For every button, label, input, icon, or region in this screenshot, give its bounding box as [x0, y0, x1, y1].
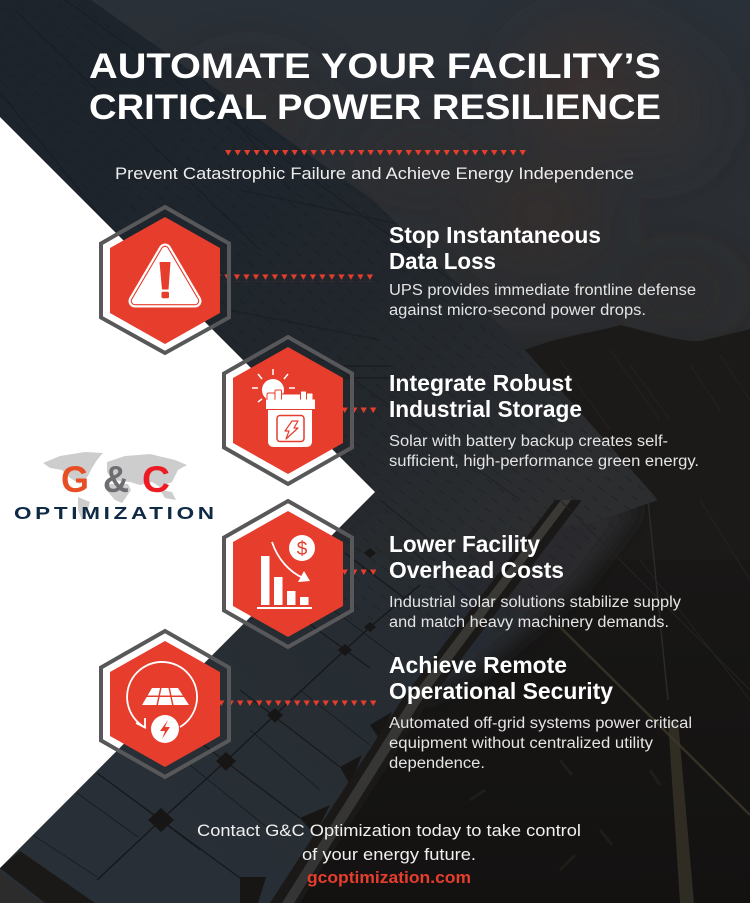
letters: & — [103, 459, 129, 500]
section 2 text: Solar with battery backup creates self- — [389, 433, 668, 450]
call to action — [197, 821, 581, 887]
connector: hexagon 4 to text — [218, 700, 376, 708]
section 2 text: Integrate Robust — [389, 370, 572, 396]
section 1 text — [389, 222, 696, 319]
section 3 text: Overhead Costs — [389, 557, 564, 583]
section 4 text: Automated off-grid systems power critical — [389, 715, 692, 732]
logo: G&C Optimization — [14, 452, 218, 523]
title: AUTOMATE YOUR FACILITY’S — [89, 47, 661, 86]
hexagon 4: solar panel and power icon — [101, 631, 229, 777]
connector: hexagon 1 to text — [215, 274, 373, 281]
section 3 text — [389, 531, 681, 631]
icon: warning triangle — [135, 250, 195, 301]
section 3 text: and match heavy machinery demands. — [389, 614, 669, 631]
section 4 text: Operational Security — [389, 678, 613, 704]
panel joints on the lower panels — [148, 548, 392, 903]
icon: bars, arrow and dollar — [257, 535, 315, 609]
section 4 text: equipment without centralized utility — [389, 735, 653, 752]
icon: sun and battery — [252, 369, 315, 447]
section 4 text: dependence. — [389, 755, 485, 772]
world map — [43, 452, 187, 520]
section 4 text: Achieve Remote — [389, 652, 567, 678]
letters — [61, 459, 170, 500]
call to action: of your energy future. — [302, 845, 476, 864]
hexagon 1: warning icon — [101, 207, 229, 353]
title divider: red triangles — [225, 150, 526, 157]
white diagonal panel — [0, 117, 375, 868]
section 3 text: Lower Facility — [389, 531, 540, 557]
connector: hexagon 3 to text — [342, 570, 376, 576]
section 1 text: Stop Instantaneous — [389, 222, 601, 248]
call to action: Contact G&C Optimization today to take control — [197, 821, 581, 840]
icon: solar panel with circular arrow — [127, 662, 197, 743]
call to action: gcoptimization.com — [307, 868, 471, 887]
letters: G — [61, 459, 89, 500]
hexagon 2: solar battery icon — [224, 337, 352, 484]
section 4 text — [389, 652, 692, 772]
title — [89, 47, 661, 127]
section 2 text — [389, 370, 699, 470]
section 3 text: Industrial solar solutions stabilize supply — [389, 594, 681, 611]
icon: bars, arrow and dollar: $ — [297, 539, 308, 560]
hexagon 3: falling costs chart icon — [224, 501, 352, 647]
section 2 text: Industrial Storage — [389, 396, 582, 422]
section 2 text: sufficient, high-performance green energy. — [389, 453, 699, 470]
subtitle: Prevent Catastrophic Failure and Achieve Energy Independence — [115, 164, 634, 183]
section 1 text: UPS provides immediate frontline defense — [389, 282, 696, 299]
letters: C — [142, 459, 170, 500]
title: CRITICAL POWER RESILIENCE — [89, 88, 661, 127]
section 1 text: Data Loss — [389, 248, 496, 274]
wordmark: OPTIMIZATION — [14, 504, 218, 523]
connector: hexagon 2 to text — [342, 408, 376, 414]
section 1 text: against micro-second power drops. — [389, 302, 646, 319]
